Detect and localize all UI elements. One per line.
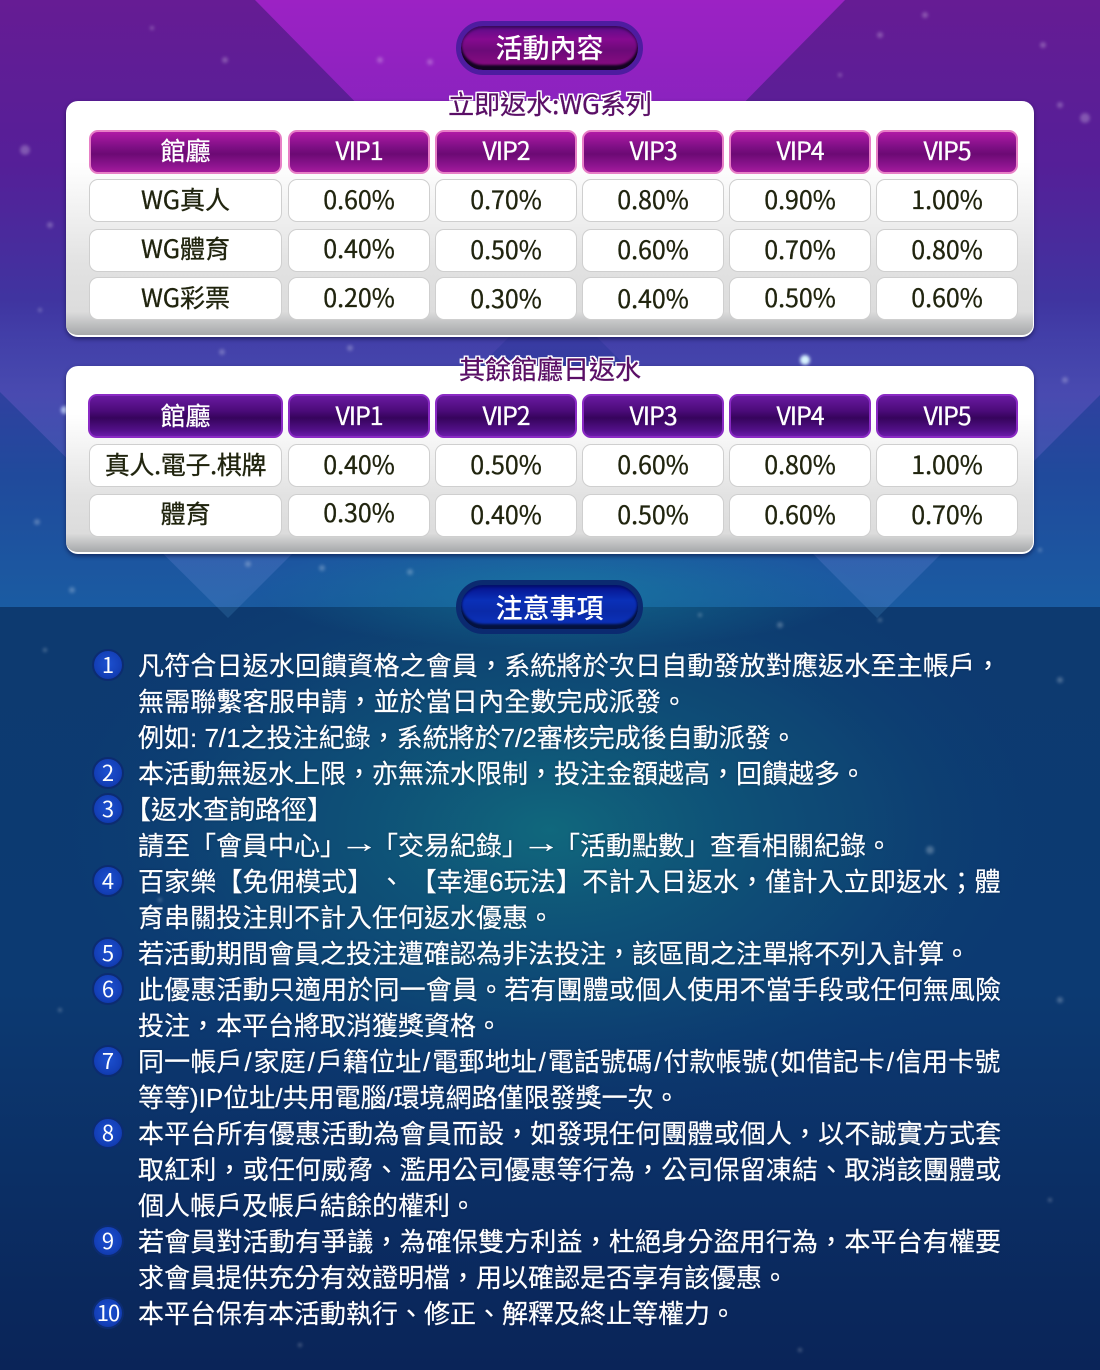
value: [876, 229, 1018, 272]
table 1 header: VIP3: [582, 130, 724, 174]
number badge 8: 8: [102, 1116, 114, 1148]
number badge 6: 6: [102, 972, 114, 1004]
panel: other venues daily rebate table: [66, 366, 1034, 554]
table 2 header: venue: [88, 394, 283, 438]
note 8 line 3: 個人帳戶及帳戶結餘的權利。: [138, 1191, 476, 1221]
value: 0.30%: [323, 494, 395, 530]
value: 0.40%: [323, 230, 395, 266]
value: [582, 494, 724, 537]
value: 1.00%: [911, 181, 983, 217]
note 3 line 2: 請至「會員中心」 「交易紀錄」 「活動點數」查看相關紀錄。: [138, 831, 892, 861]
number badge 1: [92, 649, 124, 681]
value: 0.30%: [470, 280, 542, 316]
value: [435, 179, 577, 222]
number badge 6: [92, 973, 124, 1005]
note 9 line 1: 若會員對活動有爭議，為確保雙方利益，杜絕身分盜用行為，本平台有權要: [138, 1227, 1001, 1257]
table 2 header: VIP5: [876, 394, 1018, 438]
heading: instant rebate WG series: 立即返水:WG系列: [448, 85, 652, 122]
value: 0.20%: [323, 279, 395, 315]
number badge 4: 4: [102, 864, 114, 896]
value: [876, 179, 1018, 222]
section pill: notes: 注意事項: [496, 587, 604, 626]
value: 0.70%: [470, 181, 542, 217]
number badge 5: 5: [102, 936, 114, 968]
value: 0.60%: [323, 181, 395, 217]
number badge 10: 10: [97, 1296, 119, 1328]
table 1 header: VIP5: VIP5: [923, 132, 970, 168]
note 4 line 2: 育串關投注則不計入任何返水優惠。: [138, 903, 554, 933]
table 1 row: WG sports: [89, 229, 282, 272]
value: [288, 179, 430, 222]
table 2 header: VIP3: VIP3: [629, 397, 676, 433]
table 2 header: VIP4: VIP4: [776, 397, 824, 433]
value: [582, 444, 724, 487]
note 6 line 2: 投注，本平台將取消獲獎資格。: [138, 1011, 502, 1041]
table 1 header: VIP1: VIP1: [335, 132, 382, 168]
table 2 header: VIP3: [582, 394, 724, 438]
note 3 line 2: →: [522, 828, 561, 858]
number badge 9: [92, 1225, 124, 1257]
value: [729, 494, 871, 537]
note 8 line 1: 本平台所有優惠活動為會員而設，如發現任何團體或個人，以不誠實方式套: [138, 1119, 1001, 1149]
value: 0.70%: [911, 496, 983, 532]
note 9 line 2: 求會員提供充分有效證明檔，用以確認是否享有該優惠。: [138, 1263, 788, 1293]
note 7 line 2: 等等)IP位址/共用電腦/環境網路僅限發獎一次。: [138, 1083, 680, 1113]
table 1 header: VIP4: [729, 130, 871, 174]
note 4 line 1: 百家樂【免佣模式】、【幸運6玩法】不計入日返水，僅計入立即返水；體: [138, 867, 1001, 897]
note 2: 本活動無返水上限，亦無流水限制，投注金額越高，回饋越多。: [138, 759, 866, 789]
table 1 row: WG live: [89, 179, 282, 222]
value: [876, 444, 1018, 487]
number badge 1: 1: [102, 648, 114, 680]
table 1 row: WG sports: WG體育: [141, 230, 230, 266]
table 1 header: VIP4: VIP4: [776, 132, 824, 168]
value: 0.40%: [470, 496, 542, 532]
note 1 line 1: 凡符合日返水回饋資格之會員，系統將於次日自動發放對應返水至主帳戶，: [138, 651, 1001, 681]
table 2 header: VIP1: VIP1: [335, 397, 382, 433]
value: [288, 229, 430, 272]
value: 0.60%: [617, 446, 689, 482]
value: [729, 229, 871, 272]
number badge 9: 9: [102, 1224, 114, 1256]
note 1 line 2: 無需聯繫客服申請，並於當日內全數完成派發。: [138, 687, 687, 717]
value: 0.40%: [323, 446, 395, 482]
value: [435, 277, 577, 320]
value: 0.80%: [617, 181, 689, 217]
note 1 line 3: 例如: 7/1之投注紀錄，系統將於7/2審核完成後自動派發。: [138, 723, 797, 753]
table 1 header: VIP2: [435, 130, 577, 174]
number badge 7: 7: [102, 1044, 114, 1076]
number badge 2: [92, 757, 124, 789]
number badge 3: 3: [102, 792, 114, 824]
number badge 4: [92, 865, 124, 897]
number badge 5: [92, 937, 124, 969]
section pill: activity content: 活動內容: [496, 27, 604, 66]
note 8 line 2: 取紅利，或任何威脅、濫用公司優惠等行為，公司保留凍結、取消該團體或: [138, 1155, 1001, 1185]
table 2 row: sports: [89, 494, 282, 537]
value: 0.60%: [617, 231, 689, 267]
table 1 header: VIP1: [288, 130, 430, 174]
value: [729, 277, 871, 320]
table 1 header: venue: [89, 130, 282, 174]
panel: instant rebate WG table: [66, 101, 1034, 337]
table 2 header: VIP2: VIP2: [482, 397, 530, 433]
value: 0.50%: [470, 446, 542, 482]
heading: other venues daily rebate: 其餘館廳日返水: [459, 350, 641, 387]
note 3 line 1: 【返水查詢路徑】: [125, 795, 333, 825]
value: 0.60%: [764, 496, 836, 532]
table 1 row: WG live: WG真人: [141, 181, 230, 217]
table 1 row: WG lottery: [89, 277, 282, 320]
note 3 line 2: →: [340, 828, 379, 858]
value: [876, 494, 1018, 537]
value: [288, 494, 430, 537]
value: [729, 179, 871, 222]
value: 0.60%: [911, 279, 983, 315]
table 1 header: VIP3: VIP3: [629, 132, 676, 168]
value: 0.80%: [911, 231, 983, 267]
value: [582, 277, 724, 320]
value: [435, 444, 577, 487]
value: 0.40%: [617, 280, 689, 316]
number badge 7: [92, 1045, 124, 1077]
number badge 3: [92, 793, 124, 825]
value: 0.50%: [617, 496, 689, 532]
table 2 row: sports: 體育: [160, 495, 210, 531]
table 2 header: VIP1: [288, 394, 430, 438]
note 7 line 1: 同一帳戶/家庭/戶籍位址/電郵地址/電話號碼/付款帳號(如借記卡/信用卡號: [138, 1047, 1000, 1077]
value: [729, 444, 871, 487]
note 6 line 1: 此優惠活動只適用於同一會員。若有團體或個人使用不當手段或任何無風險: [138, 975, 1001, 1005]
notes list: [92, 648, 1001, 1329]
value: [876, 277, 1018, 320]
value: [288, 444, 430, 487]
table 2 header: venue: 館廳: [160, 397, 210, 433]
table 1 header: VIP2: VIP2: [482, 132, 530, 168]
value: 0.50%: [764, 279, 836, 315]
number badge 8: [92, 1117, 124, 1149]
table 2 header: VIP2: [435, 394, 577, 438]
value: [435, 229, 577, 272]
table 1 header: venue: 館廳: [160, 132, 210, 168]
value: 0.50%: [470, 231, 542, 267]
value: 0.90%: [764, 181, 836, 217]
section pill: notes: [456, 580, 643, 634]
value: [435, 494, 577, 537]
value: [288, 277, 430, 320]
table 2 row: live, slots, chess: 真人.電子.棋牌: [105, 446, 266, 482]
table 2 header: VIP4: [729, 394, 871, 438]
table 2 header: VIP5: VIP5: [923, 397, 970, 433]
value: 1.00%: [911, 446, 983, 482]
section pill: activity content: [456, 21, 643, 75]
value: [582, 229, 724, 272]
note 5: 若活動期間會員之投注遭確認為非法投注，該區間之注單將不列入計算。: [138, 939, 970, 969]
table 1 header: VIP5: [876, 130, 1018, 174]
number badge 2: 2: [102, 756, 114, 788]
value: 0.70%: [764, 231, 836, 267]
table 1 row: WG lottery: WG彩票: [141, 279, 230, 315]
number badge 10: [92, 1297, 124, 1329]
note 10: 本平台保有本活動執行、修正、解釋及終止等權力。: [138, 1299, 736, 1329]
value: [582, 179, 724, 222]
value: 0.80%: [764, 446, 836, 482]
